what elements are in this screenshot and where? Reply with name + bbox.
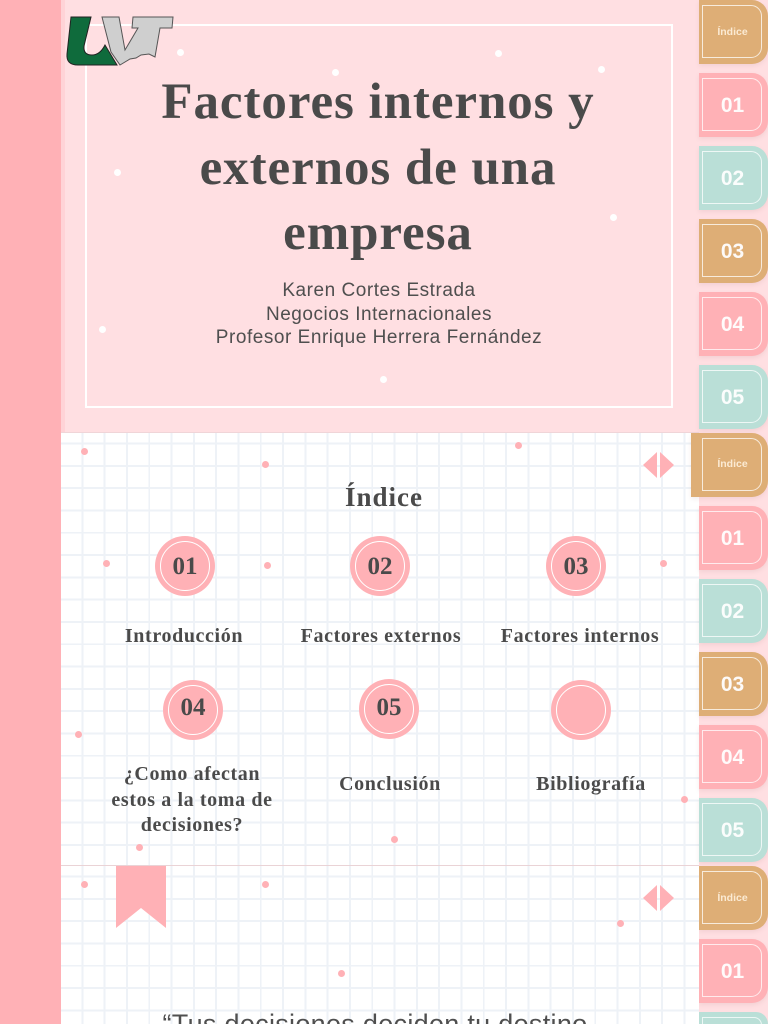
index item 04 bbox=[163, 680, 223, 740]
label: Introducción: Introducción bbox=[125, 625, 243, 647]
tab: 04: 04 bbox=[721, 313, 744, 336]
icon: UVT logo bbox=[66, 16, 174, 66]
index item 02 bbox=[350, 536, 410, 596]
left pink spine bbox=[0, 0, 61, 1024]
tab: 02 bbox=[699, 579, 768, 643]
label: Factores externos: Factores externos bbox=[301, 625, 461, 647]
label: Conclusión: Conclusión bbox=[339, 773, 441, 795]
index item 02: 02 bbox=[368, 553, 392, 580]
tab: 01 bbox=[699, 73, 768, 137]
label: Como afectan: ¿Como afectan bbox=[124, 763, 260, 785]
index item 05 bbox=[359, 679, 419, 739]
tab: 04: 04 bbox=[721, 746, 744, 769]
label: Como afectan: estos a la toma de bbox=[111, 788, 273, 810]
title bbox=[161, 74, 595, 261]
tab: 05: 05 bbox=[721, 386, 744, 409]
heading: Índice: Índice bbox=[345, 482, 423, 512]
index item 01 bbox=[155, 536, 215, 596]
tab: 02 bbox=[699, 146, 768, 210]
panel: tab column slide 1 bbox=[699, 0, 768, 430]
title: Factores internos y bbox=[161, 74, 595, 130]
tab: Índice: Índice bbox=[717, 26, 748, 38]
tab: 03 bbox=[699, 652, 768, 716]
panel: quote slide bbox=[61, 866, 699, 1024]
tab: 04 bbox=[699, 292, 768, 356]
tab: Índice active bbox=[691, 433, 768, 497]
tab: Índice active: Índice bbox=[717, 458, 748, 470]
tab: 01 bbox=[699, 939, 768, 1003]
tab: 01 bbox=[699, 506, 768, 570]
tab: Índice bbox=[699, 0, 768, 64]
tab: 03 bbox=[699, 219, 768, 283]
tab: 03: 03 bbox=[721, 240, 744, 263]
index item blank circle bbox=[551, 680, 611, 740]
tab: Índice: Índice bbox=[717, 892, 748, 904]
index item 03: 03 bbox=[564, 553, 588, 580]
title frame bbox=[85, 24, 673, 408]
label: Como afectan bbox=[111, 763, 273, 836]
label: Como afectan: decisiones? bbox=[141, 814, 243, 836]
tab: 05 bbox=[699, 365, 768, 429]
title: externos de una bbox=[200, 140, 556, 196]
index item 03 bbox=[546, 536, 606, 596]
tab: 01: 01 bbox=[721, 527, 744, 550]
panel: tab column slide 2 bbox=[691, 433, 768, 864]
tab: Índice bbox=[699, 866, 768, 930]
tab: 04 bbox=[699, 725, 768, 789]
tab: 05 bbox=[699, 798, 768, 862]
icon: navigation arrows index bbox=[643, 452, 674, 478]
subtitle: author details bbox=[216, 280, 542, 348]
label: Factores internos: Factores internos bbox=[501, 625, 659, 647]
subtitle: author details: Profesor Enrique Herrera Fernández bbox=[216, 327, 542, 348]
index item 01: 01 bbox=[172, 553, 198, 580]
tab: 01: 01 bbox=[721, 94, 744, 117]
index item 04: 04 bbox=[180, 694, 206, 721]
panel: index slide bbox=[61, 433, 699, 865]
icon: navigation arrows quote bbox=[643, 885, 674, 911]
icon: bookmark ribbon bbox=[116, 866, 166, 928]
panel: tab column slide 3 bbox=[699, 866, 768, 1024]
label: Bibliografía: Bibliografía bbox=[536, 773, 646, 795]
title: empresa bbox=[283, 205, 473, 261]
subtitle: author details: Negocios Internacionales bbox=[266, 304, 492, 324]
tab: 02 partial bbox=[699, 1012, 768, 1024]
tab: 01: 01 bbox=[721, 960, 744, 983]
panel: title slide bbox=[61, 0, 699, 432]
tab: 03: 03 bbox=[721, 673, 744, 696]
subtitle: author details: Karen Cortes Estrada bbox=[282, 280, 476, 301]
tab: 02: 02 bbox=[721, 167, 744, 190]
tab: 02: 02 bbox=[721, 600, 744, 623]
tab: 05: 05 bbox=[721, 819, 744, 842]
index item 05: 05 bbox=[376, 694, 402, 721]
